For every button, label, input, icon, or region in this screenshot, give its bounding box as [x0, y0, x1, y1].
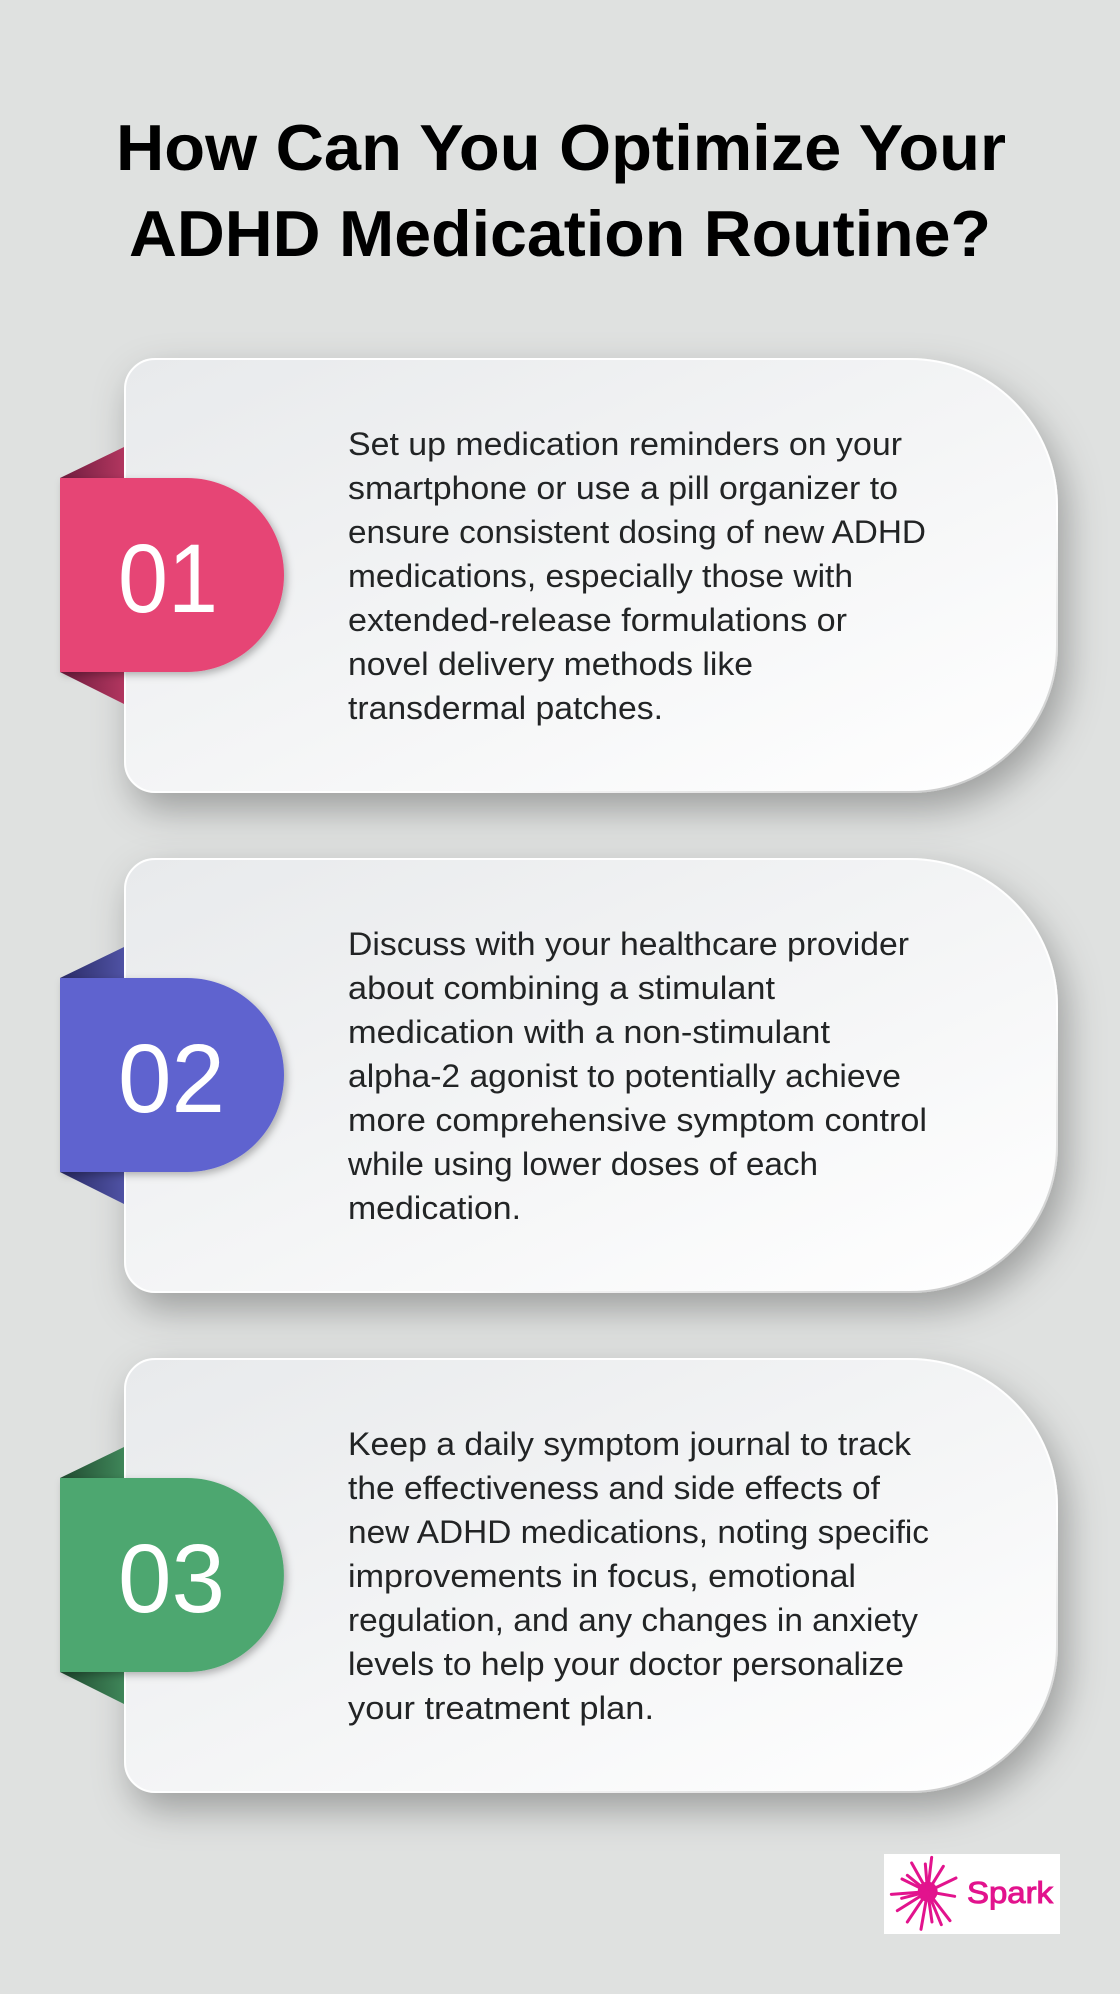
number badge: [60, 1478, 284, 1672]
step 03 text: regulation, and any changes in anxiety: [348, 1602, 918, 1638]
panel: step 03: [60, 1359, 1057, 1792]
step 02 text: while using lower doses of each: [347, 1146, 818, 1182]
step 02 text: more comprehensive symptom control: [348, 1102, 927, 1138]
step 03 text: levels to help your doctor personalize: [348, 1646, 904, 1682]
ribbon fold bottom: [60, 1172, 124, 1204]
step 01 text: smartphone or use a pill organizer to: [348, 470, 898, 506]
logo background: [884, 1854, 1060, 1934]
step 02 text: about combining a stimulant: [348, 970, 775, 1006]
step 01 text: novel delivery methods like: [348, 646, 753, 682]
step 01 text: extended-release formulations or: [348, 602, 847, 638]
card background: [125, 359, 1057, 792]
ribbon fold top: [60, 447, 124, 478]
number 01: 01: [118, 524, 218, 633]
icon: starburst: [891, 1857, 956, 1929]
step 01 text: transdermal patches.: [348, 690, 663, 726]
panel: step 01: [60, 359, 1057, 792]
logo wordmark: Spark: [967, 1875, 1054, 1910]
step 03 text: new ADHD medications, noting specific: [348, 1514, 929, 1550]
step 02 text: medication with a non-stimulant: [348, 1014, 830, 1050]
step 03 text: Keep a daily symptom journal to track: [348, 1426, 912, 1462]
step 02 text: [347, 926, 927, 1226]
card background: [125, 1359, 1057, 1792]
title: How Can You Optimize Your: [116, 111, 1006, 184]
number 02: 02: [118, 1024, 225, 1133]
step 01 text: Set up medication reminders on your: [348, 426, 902, 462]
number badge: [60, 978, 284, 1172]
step 03 text: improvements in focus, emotional: [348, 1558, 856, 1594]
ribbon fold bottom: [60, 1672, 124, 1704]
ribbon fold bottom: [60, 672, 124, 704]
step 02 text: Discuss with your healthcare provider: [348, 926, 909, 962]
number 03: 03: [118, 1524, 225, 1633]
step 02 text: alpha-2 agonist to potentially achieve: [348, 1058, 901, 1094]
step 01 text: medications, especially those with: [348, 558, 853, 594]
ribbon fold top: [60, 947, 124, 978]
number badge: [60, 478, 284, 672]
step 02 text: medication.: [348, 1190, 521, 1226]
ribbon fold top: [60, 1447, 124, 1478]
card background: [125, 859, 1057, 1292]
title: ADHD Medication Routine?: [129, 197, 991, 270]
panel: step 02: [60, 859, 1057, 1292]
step 03 text: the effectiveness and side effects of: [348, 1470, 880, 1506]
logo: Spark: [884, 1854, 1060, 1934]
step 01 text: ensure consistent dosing of new ADHD: [348, 514, 926, 550]
step 03 text: your treatment plan.: [348, 1690, 654, 1726]
step 01 text: [348, 426, 926, 726]
step 03 text: [348, 1426, 929, 1726]
title: [116, 111, 1006, 270]
